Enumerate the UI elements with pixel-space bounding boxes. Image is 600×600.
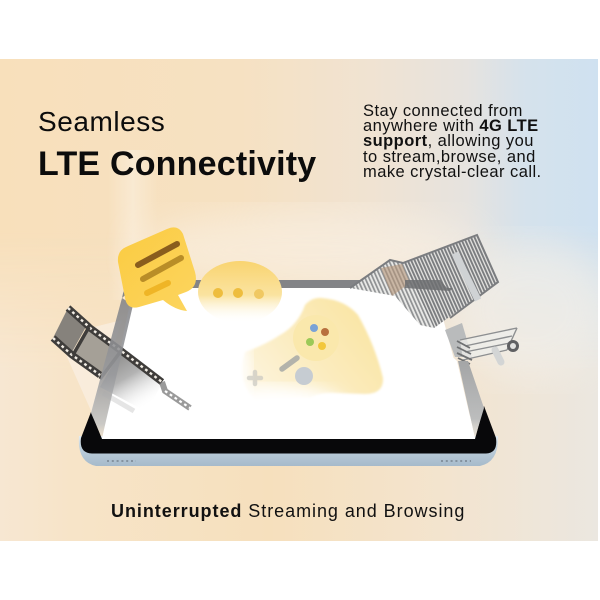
left light beam [67,320,122,413]
button blue [310,324,318,332]
cart pole [445,323,472,357]
icon: film strip [53,308,190,412]
screen edge repair [440,345,475,438]
tablet left frame [91,298,133,438]
heading: Seamless: Seamless [38,106,165,137]
cart basket side [350,260,434,328]
description text block: make crystal-clear call. [363,163,542,181]
bottom of tablet screen [102,416,475,439]
film frame 1 [53,308,87,352]
cart contents [381,264,410,296]
d-pad [249,372,261,384]
description text block: Stay connected from [363,102,523,120]
film frame 2 [75,328,120,378]
cart corner bar [455,253,478,300]
film tail [162,382,190,408]
description text block: support, allowing you [363,132,534,150]
tablet chassis [79,436,498,466]
button red [321,328,329,336]
dot [233,288,243,298]
description text block: to stream,browse, and [363,148,536,166]
film frame 3 [100,352,162,412]
tablet speaker dots left [107,460,136,462]
cart leg [495,350,501,362]
icon: game controller [203,298,383,430]
select bar [282,358,297,369]
icon: shopping cart [335,235,519,438]
dot [213,288,223,298]
cart lower rack [460,328,517,360]
tablet screen [102,288,475,439]
bubble line 1 [138,244,177,265]
tablet [67,280,498,466]
button green [306,338,314,346]
button yellow [318,342,326,350]
cart white fade [335,296,455,372]
film top perforated band [68,308,162,382]
tablet shadow [90,464,488,468]
bubble line 2 [143,258,181,279]
caption: Uninterrupted Streaming and Browsing [111,501,465,521]
tablet speaker dots right [441,460,471,462]
cart rim [350,235,498,318]
film bottom perforated band [53,338,100,375]
heading: LTE Connectivity: LTE Connectivity [38,145,316,183]
description text block [363,102,542,181]
icon: yellow chat bubble [118,227,196,311]
film dividers [73,327,121,379]
dot [254,289,264,299]
tablet right frame [458,361,484,438]
tablet bezel bottom [81,406,496,454]
cart basket front [403,235,498,328]
icon: round chat bubble [198,261,282,323]
top frame through cart [405,280,453,291]
cart wheel [507,340,519,352]
analog stick [295,367,313,385]
bubble line 3 [147,283,168,293]
controller button disc [293,315,339,361]
tablet top frame [122,280,450,298]
description text block: anywhere with 4G LTE [363,117,539,135]
controller fade [203,386,347,430]
